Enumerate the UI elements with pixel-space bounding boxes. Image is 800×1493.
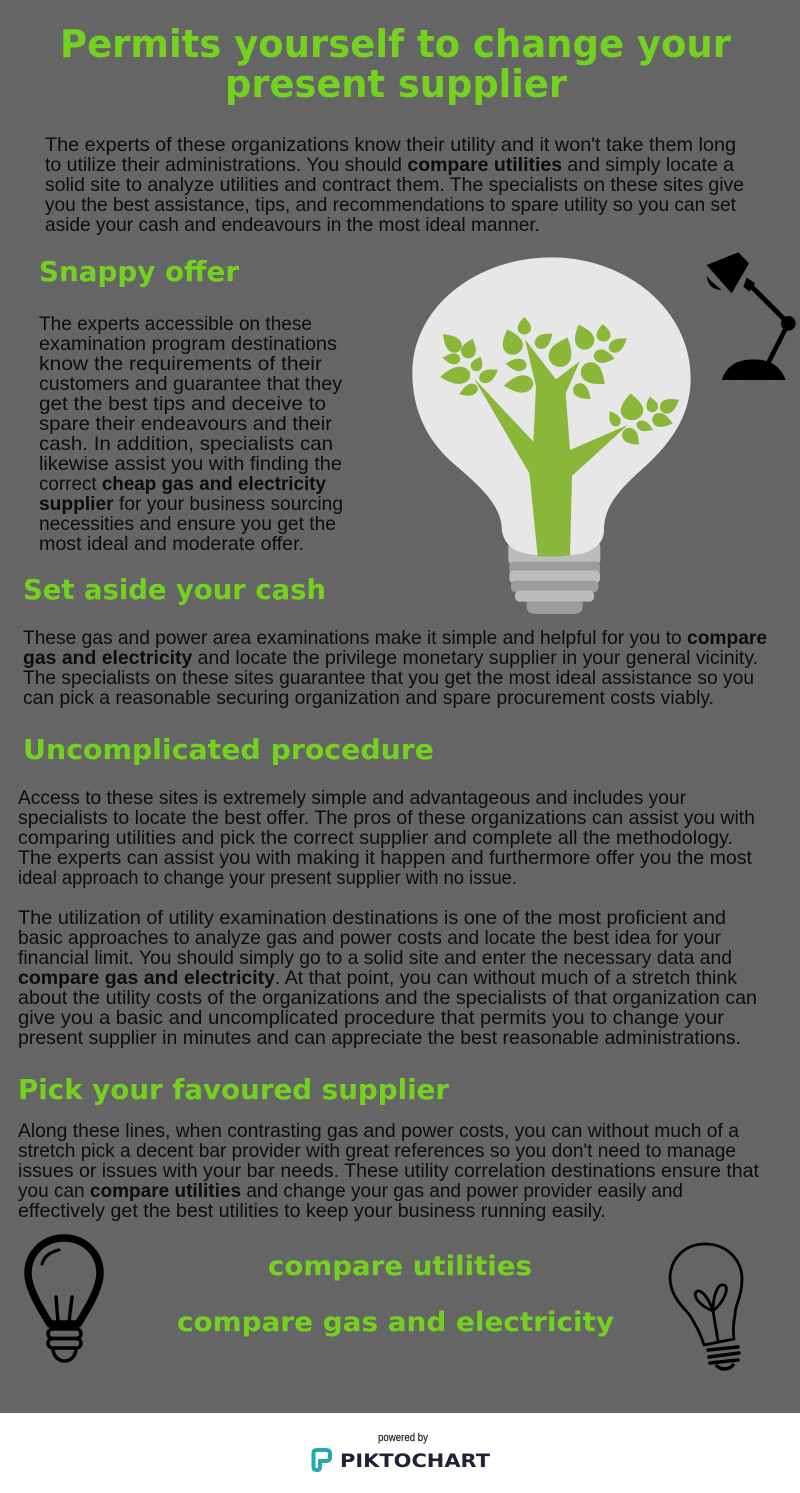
heading: Uncomplicated procedure: Uncomplicated procedure [23, 733, 434, 766]
intro paragraph: The experts of these organizations know their utility and it won't take them long [45, 134, 736, 156]
bulb screw base [508, 542, 600, 614]
icon: desk lamp [707, 252, 796, 380]
intro paragraph [45, 134, 744, 236]
text block: Uncomplicated procedure, first paragraph: Access to these sites is extremely simple and advantageous and includes your [18, 787, 686, 809]
text block: Pick your favoured supplier: Along these lines, when contrasting gas and power costs, you can without much of a [18, 1120, 739, 1142]
title: present supplier [225, 62, 567, 106]
heading: Pick your favoured supplier: Pick your favoured supplier [18, 1073, 449, 1106]
footer text: powered by: powered by [378, 1432, 428, 1444]
text block: Uncomplicated procedure, first paragraph: The experts can assist you with making it happen and furthermore offer you the most [18, 847, 753, 869]
intro paragraph: you the best assistance, tips, and recommendations to spare utility so you can set [45, 194, 737, 216]
icon: outline bulb left [28, 1238, 100, 1361]
heading: Set aside your cash: Set aside your cash [23, 573, 326, 606]
text block: Set aside your cash: gas and electricity and locate the privilege monetary supplier in your general vicinity. [23, 647, 758, 669]
text block: Snappy offer: likewise assist you with finding the [39, 453, 342, 475]
text block: Uncomplicated procedure, second paragraph: present supplier in minutes and can appreciate the best reasonable administrations. [18, 1027, 741, 1049]
intro paragraph: aside your cash and endeavours in the most ideal manner. [45, 214, 540, 236]
logo wordmark: PIKTOCHART [340, 1450, 490, 1472]
intro paragraph: to utilize their administrations. You should compare utilities and simply locate a [45, 154, 734, 176]
icon: light bulb with tree [412, 257, 691, 614]
text block: Uncomplicated procedure, first paragraph: ideal approach to change your present supplier with no issue. [18, 867, 517, 889]
text block: Uncomplicated procedure, second paragraph: financial limit. You should simply go to a solid site and enter the necessary data and [18, 947, 732, 969]
text block: Uncomplicated procedure, second paragraph: about the utility costs of the organizations and the specialists of that organization can [18, 987, 757, 1009]
text block: Uncomplicated procedure, first paragraph [18, 787, 755, 889]
text block: Set aside your cash [23, 627, 767, 709]
text block: Snappy offer [39, 313, 343, 555]
text block: Snappy offer: customers and guarantee that they [39, 373, 342, 395]
text block: Pick your favoured supplier: you can compare utilities and change your gas and power provider easily and [18, 1180, 683, 1202]
text block: Snappy offer: spare their endeavours and their [39, 413, 333, 435]
highlighted term: compare gas and electricity: compare gas and electricity [177, 1307, 614, 1338]
text block: Snappy offer: get the best tips and deceive to [39, 393, 326, 415]
intro paragraph: solid site to analyze utilities and contract them. The specialists on these sites give [45, 174, 744, 196]
text block: Uncomplicated procedure, second paragraph: basic approaches to analyze gas and power costs and locate the best idea for your [18, 927, 721, 949]
text block: Uncomplicated procedure, second paragraph: compare gas and electricity. At that point, you can without much of a stretch think [18, 967, 737, 989]
text block: Snappy offer: examination program destinations [39, 333, 337, 355]
text block: Snappy offer: The experts accessible on these [39, 313, 312, 335]
text block: Snappy offer: most ideal and moderate offer. [39, 533, 304, 555]
heading: Snappy offer: Snappy offer [39, 255, 239, 288]
logo mark [314, 1450, 330, 1470]
text block: Uncomplicated procedure, second paragraph [18, 907, 757, 1049]
text block: Snappy offer: cash. In addition, specialists can [39, 433, 333, 455]
text block: Snappy offer: necessities and ensure you get the [39, 513, 336, 535]
footer panel [0, 1413, 800, 1493]
text block: Snappy offer: correct cheap gas and electricity [39, 473, 326, 495]
text block: Uncomplicated procedure, first paragraph: specialists to locate the best offer. The pros of these organizations can assist you with [18, 807, 755, 829]
text block: Pick your favoured supplier: stretch pick a decent bar provider with great references so you don't need to manage [18, 1140, 736, 1162]
text block: Set aside your cash: The specialists on these sites guarantee that you get the most ideal assistance so you [23, 667, 754, 689]
title: Permits yourself to change your [60, 22, 731, 66]
text block: Pick your favoured supplier: issues or issues with your bar needs. These utility correlation destinations ensure that [18, 1160, 760, 1182]
title [60, 22, 731, 106]
text block: Uncomplicated procedure, second paragraph: give you a basic and uncomplicated procedure that permits you to change your [18, 1007, 725, 1029]
icon: outline bulb right [670, 1244, 742, 1369]
text block: Pick your favoured supplier: effectively get the best utilities to keep your business running easily. [18, 1200, 606, 1222]
bulb glass [412, 257, 691, 556]
text block: Set aside your cash: These gas and power area examinations make it simple and helpful for you to compare [23, 627, 767, 649]
text block: Uncomplicated procedure, second paragraph: The utilization of utility examination destinations is one of the most proficient and [18, 907, 726, 929]
tree [438, 317, 682, 557]
text block: Snappy offer: supplier for your business sourcing [39, 493, 343, 515]
text block: Pick your favoured supplier [18, 1120, 760, 1222]
logo: Piktochart [314, 1450, 490, 1472]
text block: Set aside your cash: can pick a reasonable securing organization and spare procurement costs viably. [23, 687, 714, 709]
highlighted term: compare utilities: compare utilities [268, 1251, 532, 1282]
text block: Snappy offer: know the requirements of their [39, 353, 323, 375]
text block: Uncomplicated procedure, first paragraph: comparing utilities and pick the correct supplier and complete all the methodology. [18, 827, 733, 849]
